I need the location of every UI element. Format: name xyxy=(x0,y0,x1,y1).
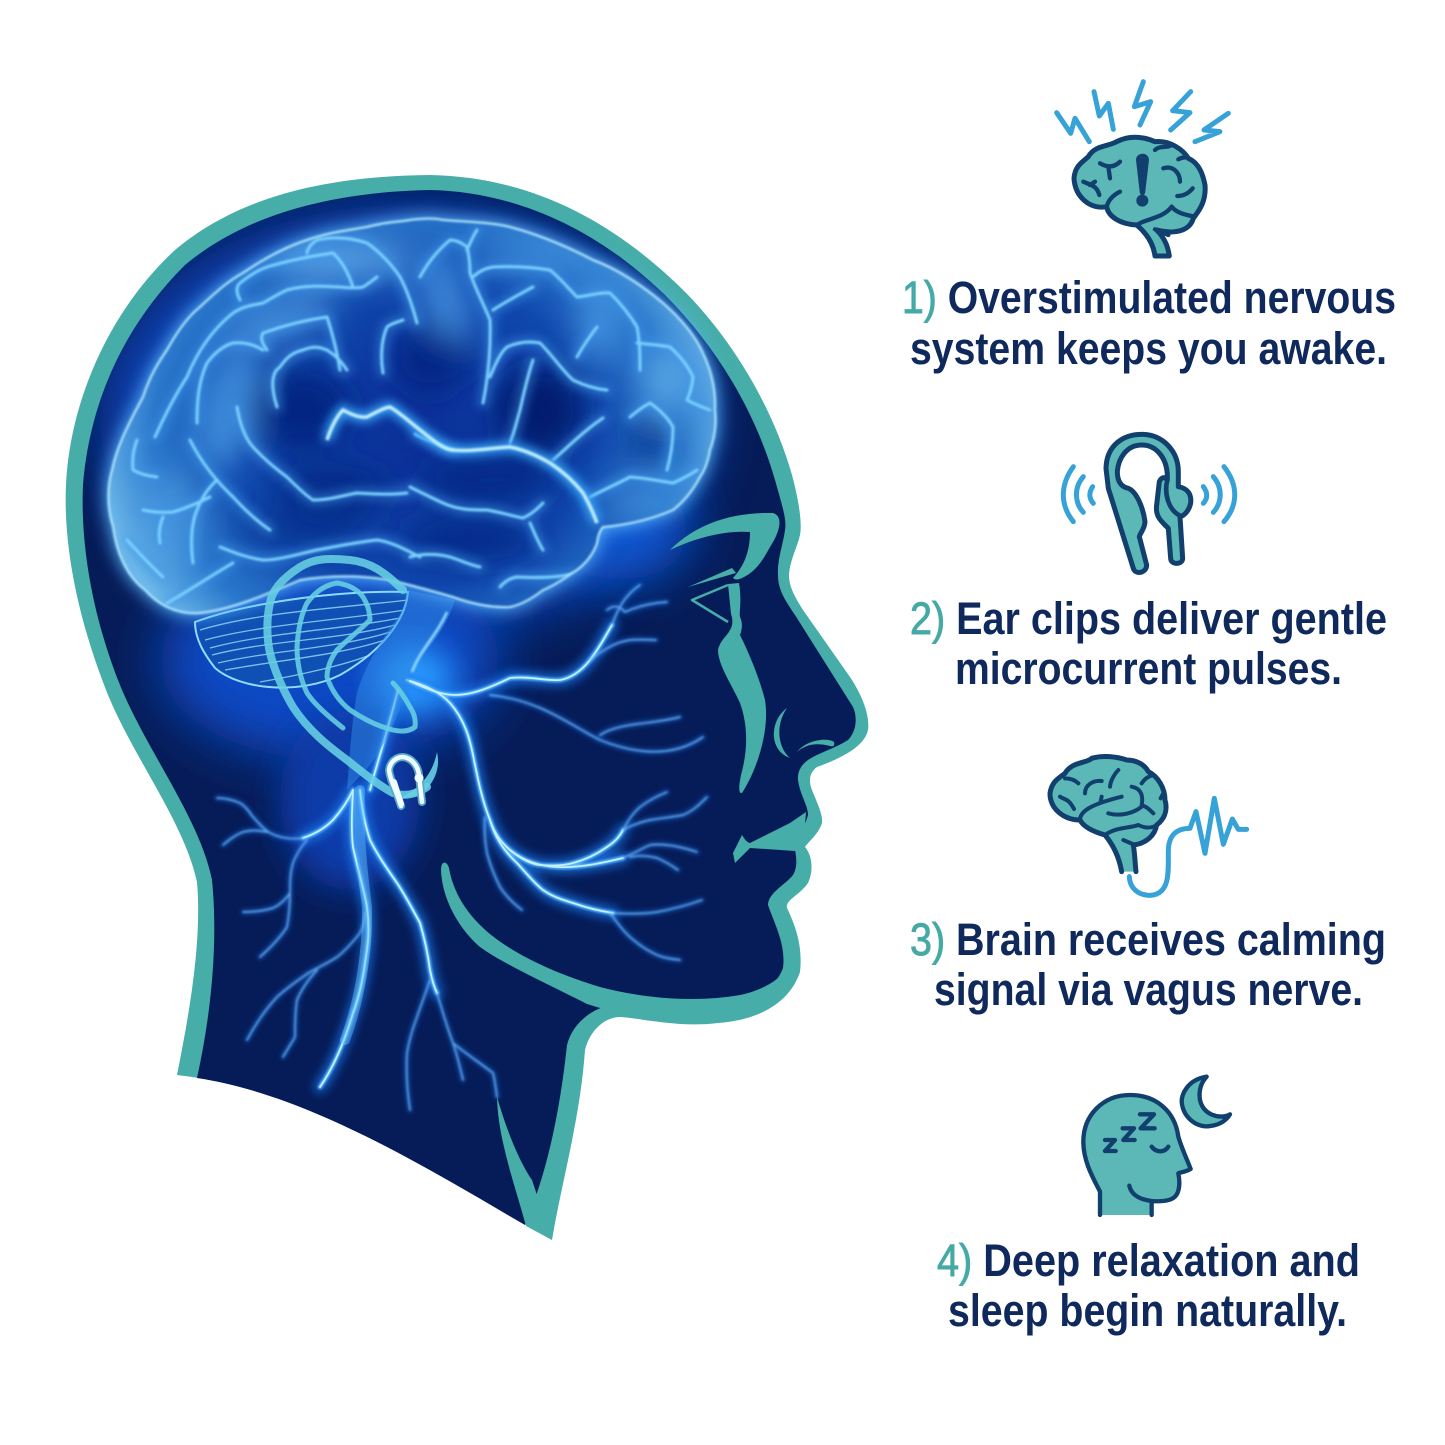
nose bridge xyxy=(718,583,766,793)
central bright fold xyxy=(327,407,597,523)
step 4 xyxy=(937,1077,1360,1336)
step 1 xyxy=(902,82,1396,374)
icon: sleeping head and moon xyxy=(1083,1077,1230,1215)
icon: ear clip xyxy=(1063,434,1235,572)
step 3 xyxy=(910,757,1386,1015)
upper eyelid xyxy=(688,568,736,587)
vagus trunk xyxy=(345,790,367,1040)
ear xyxy=(267,559,427,795)
heading 4: 4) Deep relaxation and xyxy=(937,1235,1360,1286)
step 3: signal via vagus nerve. xyxy=(934,964,1363,1015)
step 4: sleep begin naturally. xyxy=(948,1285,1347,1336)
nostril xyxy=(797,740,834,752)
head outline xyxy=(66,175,868,1240)
heading 3: 3) Brain receives calming xyxy=(910,914,1386,965)
icon: overstimulated brain xyxy=(1057,82,1228,256)
head illustration xyxy=(66,175,868,1240)
eye xyxy=(692,585,728,622)
ear lobe crescent xyxy=(395,752,438,800)
step 2 xyxy=(910,434,1387,694)
step 1: system keeps you awake. xyxy=(910,323,1387,374)
step 2: microcurrent pulses. xyxy=(955,643,1342,694)
eyebrow xyxy=(670,513,779,580)
brain aura xyxy=(100,205,710,635)
nerves xyxy=(217,585,707,1110)
brainstem xyxy=(347,590,455,790)
head dark fill xyxy=(83,190,856,1225)
nostril crescent xyxy=(774,708,790,758)
ear clip device xyxy=(389,757,424,806)
heading 2: 2) Ear clips deliver gentle xyxy=(910,593,1387,644)
front neck wedge xyxy=(497,1097,552,1240)
mouth xyxy=(733,812,806,863)
icon: brain with signal xyxy=(1050,757,1247,895)
cerebellum xyxy=(195,592,408,688)
nerve glow xyxy=(217,585,707,1110)
brain shading xyxy=(140,240,690,570)
jaw line xyxy=(441,863,778,1012)
brain xyxy=(108,218,716,613)
